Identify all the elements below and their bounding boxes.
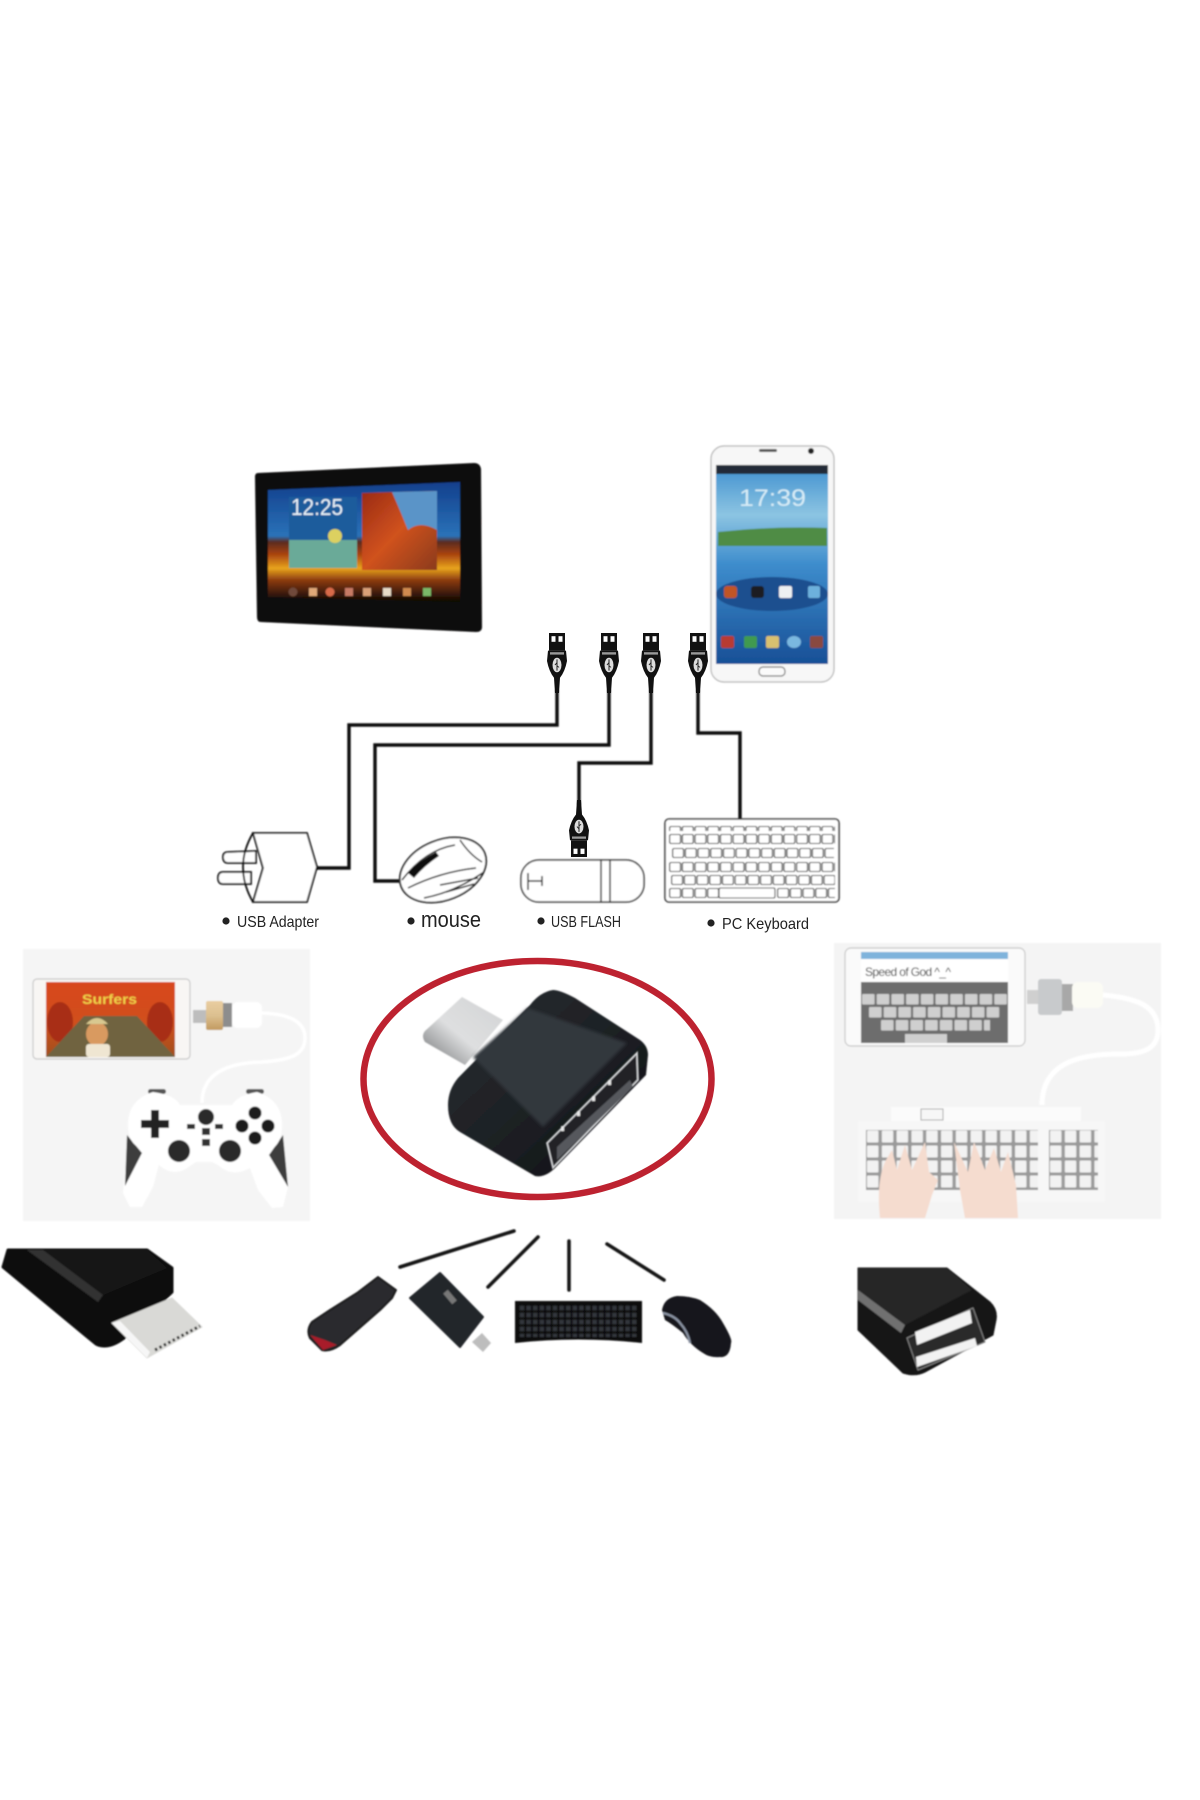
left grip shadow [125, 1135, 142, 1186]
panel: phone with gamepad [23, 949, 310, 1221]
photo: flash drive [308, 1277, 396, 1350]
game screen [46, 982, 175, 1057]
cable: USB adapter [316, 690, 557, 868]
tablet body [255, 463, 482, 632]
tablet clock widget [289, 497, 357, 540]
micro connector [193, 1010, 206, 1023]
game title: Surfers [82, 991, 137, 1007]
cables [316, 690, 740, 881]
label: USB FLASH [537, 914, 621, 931]
panel: phone with keyboard [834, 943, 1161, 1219]
right hand [954, 1142, 1018, 1218]
photo: USB card reader [410, 1273, 491, 1352]
d-pad [141, 1110, 169, 1138]
charger prong top [223, 851, 256, 863]
right grip shadow [269, 1135, 288, 1187]
micro USB tip [423, 997, 503, 1065]
shoulder buttons [148, 1089, 264, 1094]
phone home button [759, 667, 785, 676]
pad body [128, 1092, 282, 1172]
icon: line-art USB flash drive [521, 860, 644, 902]
micro connector [1027, 990, 1038, 1004]
tablet artwork [362, 491, 437, 570]
callout: red ellipse with OTG adapter [364, 961, 712, 1197]
pointer to keyboard [567, 1241, 571, 1290]
tablet screen [268, 482, 460, 602]
tablet clock: 12:25 [291, 494, 343, 520]
micro USB connector photo [3, 1250, 202, 1358]
phone in landscape [845, 948, 1025, 1046]
phone dock icons [724, 586, 820, 598]
on-screen keyboard [861, 982, 1008, 1043]
plug contacts [155, 1326, 200, 1350]
right grip [247, 1137, 288, 1208]
icon: line-art keyboard [665, 819, 839, 902]
usb plug 4 [688, 633, 708, 693]
tablet weather widget [289, 540, 357, 568]
panel background [834, 943, 1161, 1219]
phone grass band [718, 528, 827, 546]
charger back edge [243, 833, 253, 902]
pointer to mouse [607, 1244, 664, 1280]
number pad keys [1049, 1130, 1098, 1190]
game arches [47, 1002, 173, 1042]
phone clock: 17:39 [739, 485, 806, 512]
white plug [1072, 982, 1103, 1008]
gamepad [123, 1089, 288, 1208]
port bottom contact [916, 1338, 977, 1367]
usb plug 5 into flash drive [569, 800, 589, 857]
typed text: Speed of God ^_^ [865, 965, 951, 979]
keyboard body [858, 1121, 1105, 1202]
phone screen [716, 465, 828, 664]
label: USB FLASH: USB FLASH [551, 914, 621, 931]
port opening [907, 1308, 985, 1370]
space bar [905, 1034, 947, 1043]
top face highlight [858, 1268, 972, 1325]
tablet dock icons [288, 588, 431, 596]
tablet sky detail [392, 491, 437, 530]
usb plug 3 [641, 633, 661, 693]
silver adapter [1038, 979, 1062, 1015]
smartphone [711, 446, 834, 682]
pointer to flash drive [400, 1231, 514, 1267]
text field [861, 959, 1008, 982]
white plug [232, 1002, 262, 1028]
phone dock oval [716, 577, 828, 611]
port top contact [915, 1310, 972, 1345]
charger prong bottom [218, 872, 251, 884]
usb plug 2 [599, 633, 619, 693]
phone in landscape [33, 979, 190, 1059]
connector top face [43, 1250, 167, 1295]
left grip [123, 1137, 162, 1207]
center buttons [187, 1124, 223, 1146]
tablet [255, 463, 482, 632]
photo: black keyboard [515, 1301, 642, 1343]
pointer lines to peripherals [400, 1231, 664, 1290]
panel background [23, 949, 310, 1221]
charger body [253, 833, 317, 902]
game character [86, 1018, 110, 1057]
adapter body [448, 990, 648, 1176]
keyboard brand tag [921, 1109, 943, 1120]
white cable [1042, 995, 1158, 1105]
cable: mouse [375, 690, 609, 881]
red ellipse [364, 961, 712, 1197]
phone body [711, 446, 834, 682]
connector side highlight [27, 1250, 103, 1302]
usb plug 1 [547, 633, 567, 693]
plug neck [223, 1003, 232, 1027]
left hand [879, 1142, 938, 1218]
connector body [858, 1268, 996, 1375]
metal plug [112, 1298, 202, 1358]
USB port [547, 1053, 638, 1168]
gold adapter [206, 1001, 223, 1030]
icon: line-art mouse [390, 825, 496, 915]
phone speaker and camera [759, 448, 814, 454]
label: PC Keyboard: PC Keyboard [722, 916, 809, 933]
label: mouse: mouse [421, 907, 481, 932]
phone status bar [716, 465, 828, 474]
pointer to card reader [488, 1237, 538, 1287]
action buttons [236, 1106, 274, 1144]
adapter port [1062, 984, 1073, 1011]
label: USB Adapter: USB Adapter [237, 914, 320, 931]
photo: black mouse [662, 1296, 731, 1357]
metal plug front edge [112, 1321, 150, 1358]
blue status bar [861, 952, 1008, 960]
game track [46, 1016, 175, 1057]
connector body [3, 1250, 172, 1346]
keyboard top [891, 1107, 1081, 1123]
cable: keyboard [698, 690, 740, 820]
center logo [198, 1109, 214, 1125]
adapter top face [473, 1008, 627, 1127]
tablet weather sun [328, 529, 342, 543]
cable: USB flash [579, 690, 651, 805]
main keys [866, 1130, 1038, 1190]
icon: wall charger [218, 833, 317, 902]
USB female connector photo [858, 1268, 996, 1375]
on-screen keys [861, 993, 1008, 1006]
phone home row icons [721, 636, 823, 648]
white cable [202, 1013, 305, 1103]
analog sticks [168, 1140, 241, 1162]
